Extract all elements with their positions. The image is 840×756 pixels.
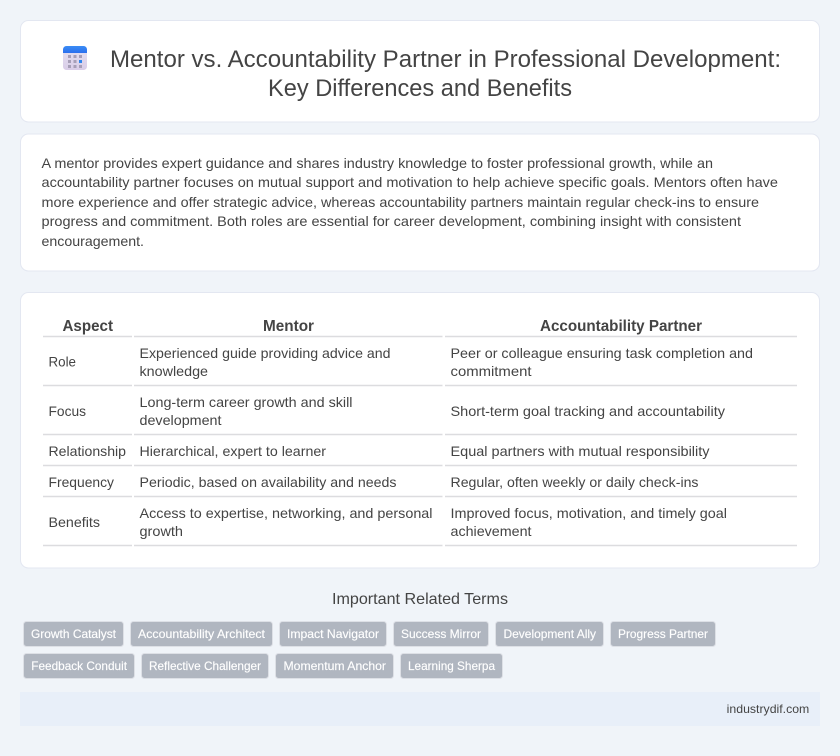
table row: Focus	[43, 394, 797, 434]
title	[110, 46, 781, 102]
panel: title card	[20, 20, 820, 122]
footer	[20, 692, 820, 726]
table row: Frequency: Frequency	[48, 474, 114, 490]
panel: comparison table	[20, 292, 820, 568]
table row: Frequency: Periodic, based on availability and needs	[140, 474, 396, 490]
table row: Focus: development	[140, 412, 222, 428]
text block: summary paragraph: more experience and offer strategic advice, whereas accountability partners maintain regular check-ins to ensure	[42, 194, 759, 210]
table row: Benefits: achievement	[450, 523, 532, 539]
table row: Role: Peer or colleague ensuring task completion and	[450, 345, 753, 361]
tag: Success Mirror	[394, 622, 488, 646]
table row: Role: knowledge	[140, 363, 208, 379]
table row: Frequency	[43, 474, 797, 496]
table row: Relationship: Relationship	[48, 443, 126, 459]
table row: Benefits: Access to expertise, networking, and personal	[140, 505, 432, 521]
table row: Role: Role	[48, 354, 76, 370]
table header row: Mentor	[263, 318, 314, 335]
tag: Momentum Anchor: Momentum Anchor	[284, 659, 386, 673]
footer: industrydif.com	[727, 702, 809, 716]
text block: summary paragraph: A mentor provides expert guidance and shares industry knowledge to foster professional growth, while an	[42, 155, 713, 171]
tag: Reflective Challenger	[142, 654, 268, 678]
title: Key Differences and Benefits	[268, 75, 572, 102]
tag: Impact Navigator: Impact Navigator	[287, 627, 379, 641]
heading: related terms: Important Related Terms	[332, 591, 508, 608]
tag: Momentum Anchor	[276, 654, 394, 678]
table row: Role: commitment	[450, 363, 532, 379]
tag: Development Ally: Development Ally	[504, 627, 596, 641]
table row: Role: Experienced guide providing advice and	[140, 345, 390, 361]
tag: Accountability Architect	[130, 622, 272, 646]
table header row: Aspect	[62, 318, 114, 335]
table row: Relationship: Hierarchical, expert to learner	[140, 443, 326, 459]
tag: Feedback Conduit: Feedback Conduit	[31, 659, 128, 673]
text block: summary paragraph: encouragement.	[42, 233, 144, 249]
panel: summary text	[20, 134, 820, 271]
text block: summary paragraph	[42, 155, 778, 249]
tag: Learning Sherpa: Learning Sherpa	[408, 659, 495, 673]
table row: Frequency: Regular, often weekly or daily check-ins	[450, 474, 698, 490]
table row: Benefits: Benefits	[48, 514, 100, 530]
tag: Success Mirror: Success Mirror	[401, 627, 481, 641]
table row: Relationship: Equal partners with mutual responsibility	[450, 443, 710, 459]
table row: Focus: Focus	[48, 403, 86, 419]
table row: Focus: Short-term goal tracking and accountability	[450, 403, 725, 419]
table row: Relationship	[43, 443, 797, 466]
tag: Accountability Architect: Accountability Architect	[138, 627, 266, 641]
table row: Benefits: growth	[140, 523, 183, 539]
tag: Growth Catalyst: Growth Catalyst	[31, 627, 117, 641]
table row: Focus: Long-term career growth and skill	[140, 394, 352, 410]
tag: Feedback Conduit	[24, 654, 134, 678]
table row: Benefits: Improved focus, motivation, and timely goal	[450, 505, 727, 521]
tag: Reflective Challenger: Reflective Challenger	[149, 659, 261, 673]
tag: Growth Catalyst	[24, 622, 124, 646]
text block: summary paragraph: accountability partner focuses on mutual support and motivation to help achieve specific goals. Mentors often have	[42, 174, 778, 190]
icon: calendar	[63, 46, 87, 70]
table row: Role	[43, 345, 797, 386]
title: Mentor vs. Accountability Partner in Professional Development:	[110, 46, 781, 73]
tag: Progress Partner: Progress Partner	[618, 627, 708, 641]
table header row	[43, 318, 797, 336]
tag: Development Ally	[496, 622, 604, 646]
text block: summary paragraph: progress and commitment. Both roles are essential for career development, combining insight with consistent	[42, 213, 741, 229]
tag: Learning Sherpa	[400, 654, 502, 678]
table row: Benefits	[43, 505, 797, 546]
tag: Impact Navigator	[280, 622, 386, 646]
table header row: Accountability Partner	[540, 318, 702, 335]
panel: related term tags	[24, 622, 716, 678]
tag: Progress Partner	[610, 622, 716, 646]
